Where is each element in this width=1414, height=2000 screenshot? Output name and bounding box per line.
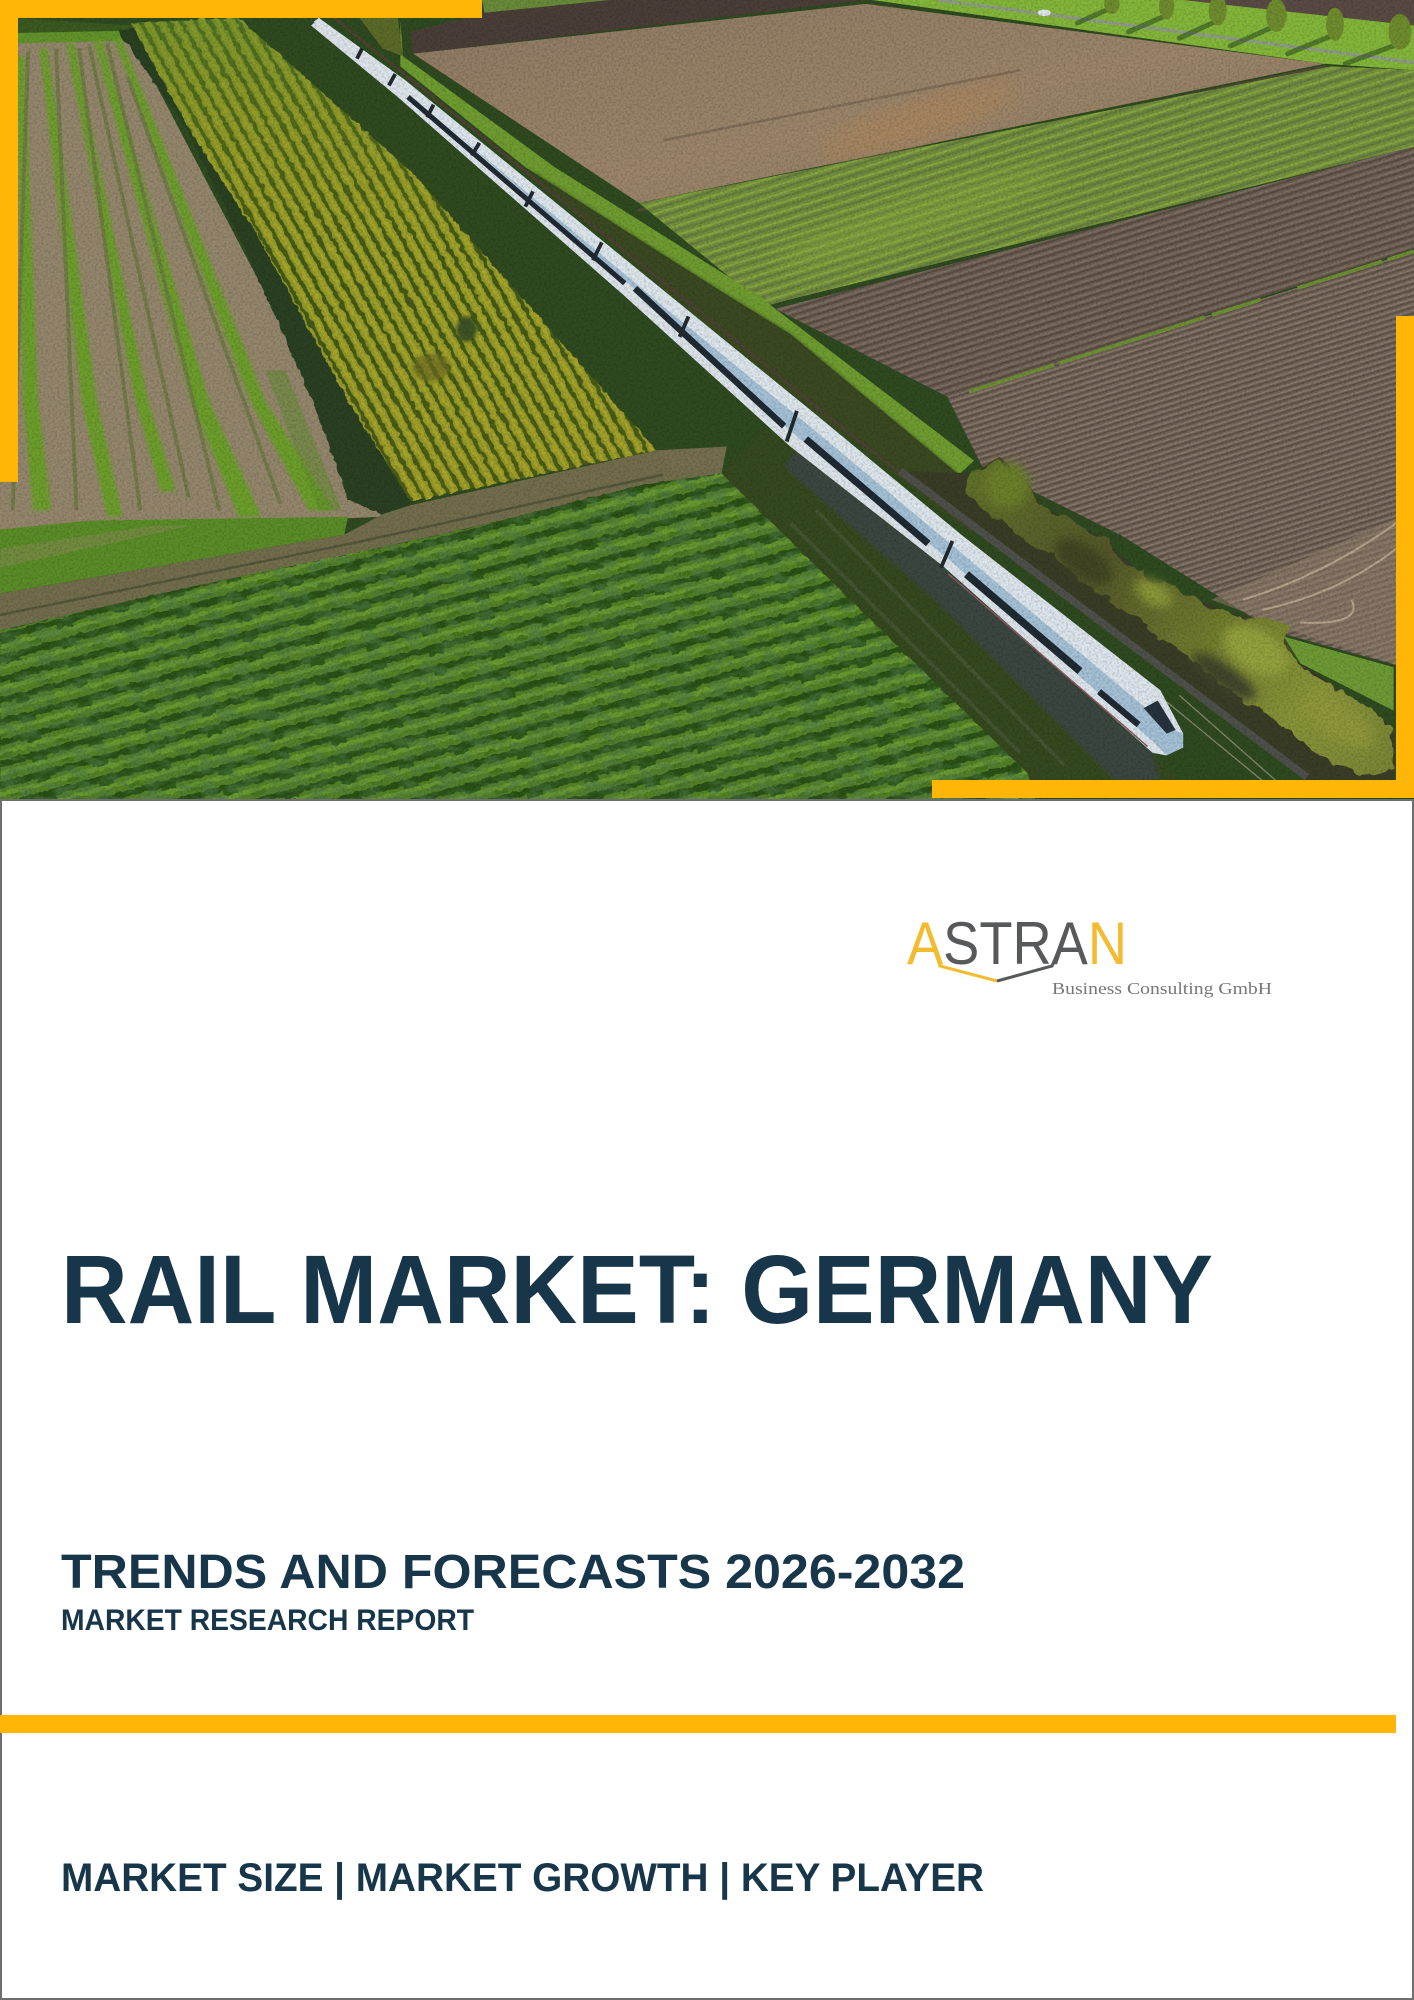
field: yellow-olive crop rows (131, 18, 657, 501)
yellow frame: bottom bar (932, 780, 1414, 798)
grass band and farm track (0, 447, 727, 630)
field: striped tan and green field at left (0, 18, 383, 533)
hedge and shrubs (900, 457, 1394, 791)
yellow frame: top bar (0, 0, 482, 18)
logo chevron (935, 950, 1058, 981)
brown field at top right (411, 0, 1326, 211)
plowed fields at right (775, 147, 1414, 670)
ground base (0, 0, 1414, 800)
logo wordmark: ASTRAN (907, 910, 1127, 977)
shadow band beside yellow field (117, 28, 421, 514)
fine photographic grain (0, 0, 1414, 800)
yellow frame: left bar (0, 0, 18, 482)
logo tagline: Business Consulting GmbH (1052, 979, 1272, 998)
grass strip and brush along the railway (334, 0, 975, 536)
report type: MARKET RESEARCH REPORT (61, 1604, 474, 1637)
green striped field at top right (639, 66, 1414, 306)
report text block (61, 1235, 1213, 1900)
contents line: MARKET SIZE | MARKET GROWTH | KEY PLAYER (61, 1856, 984, 1900)
high-speed train (311, 18, 1183, 755)
title: RAIL MARKET: GERMANY (61, 1235, 1213, 1344)
meadow, road and tree row at top right (872, 0, 1414, 70)
field: green crop rows at bottom (0, 473, 1035, 799)
yellow divider bar (0, 1715, 1396, 1733)
logo: Astran Business Consulting GmbH (907, 910, 1272, 998)
subtitle: TRENDS AND FORECASTS 2026-2032 (61, 1546, 965, 1599)
hero photo: aerial view of high-speed train crossing fields (0, 0, 1414, 799)
white report panel with grey border (0, 799, 1414, 2000)
railway bed and ballast (722, 427, 1199, 800)
yellow frame: right bar (1396, 316, 1414, 798)
